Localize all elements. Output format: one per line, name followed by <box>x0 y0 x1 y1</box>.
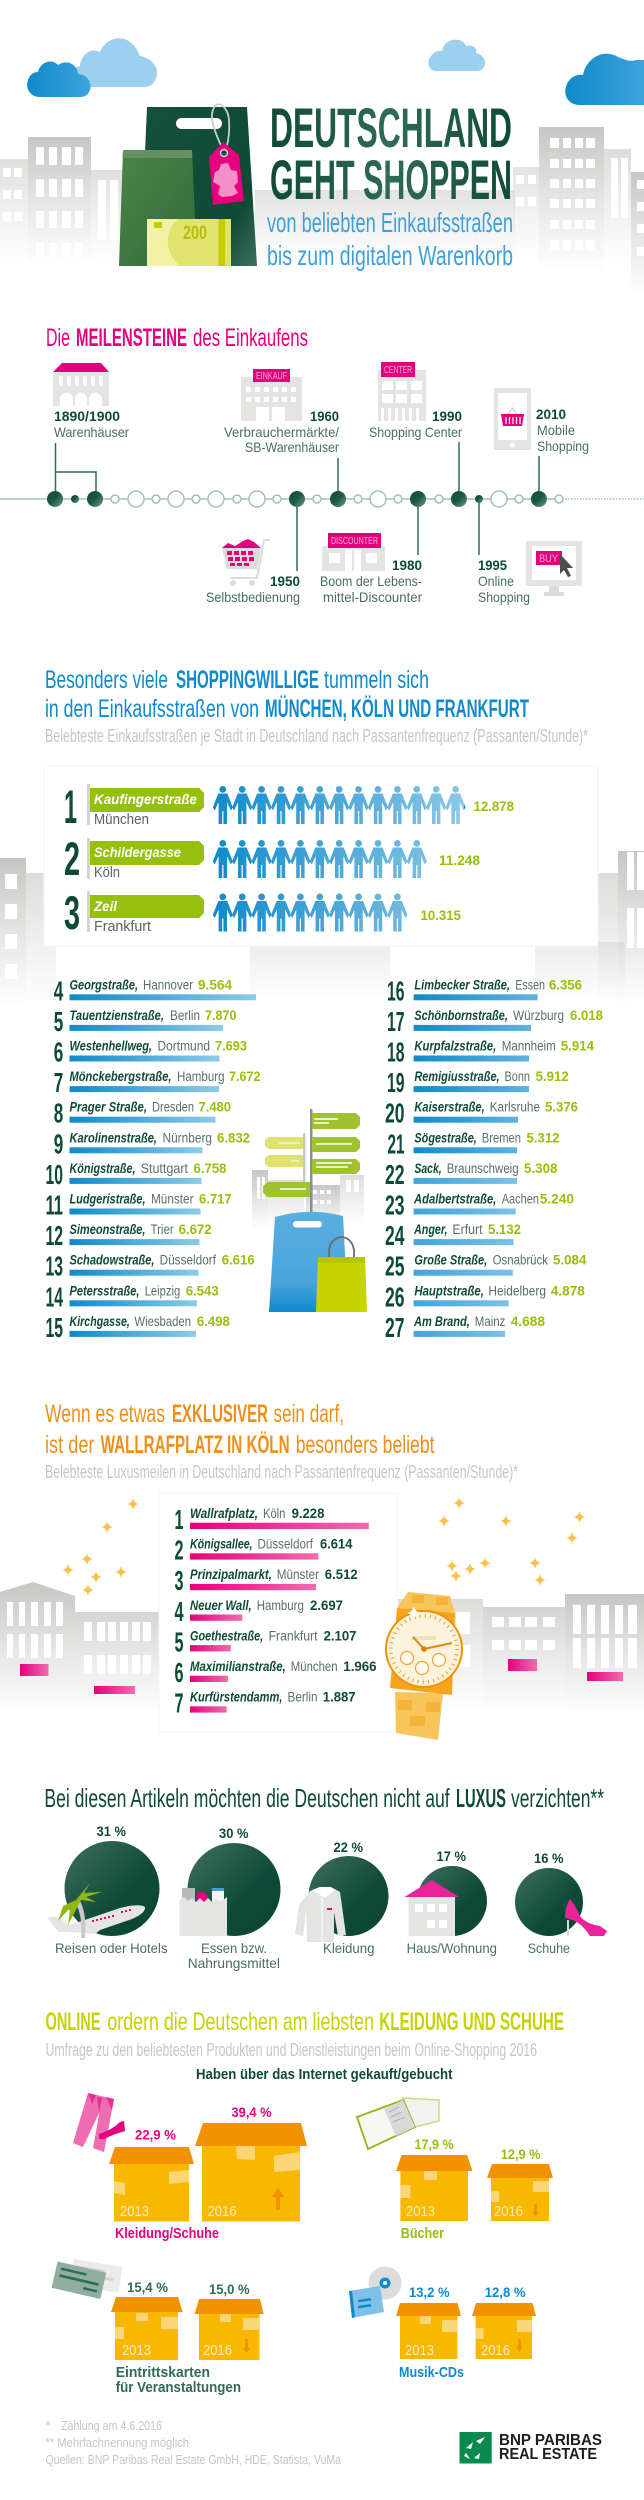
ranking list left column: ranks 4 to 15: 6.717 <box>199 1190 232 1206</box>
heading: top shopping streets: Besonders viele <box>45 666 168 694</box>
ranking list right column: ranks 16 to 27: 16 <box>387 975 404 1006</box>
icon: trousers and shoe <box>73 2093 125 2152</box>
chart: music CDs boxes: 2013 <box>405 2342 434 2359</box>
background buildings behind ranking <box>0 851 644 1008</box>
ranking list right column: ranks 16 to 27: 5.132 <box>488 1221 521 1237</box>
panel: top 3 shopping streets <box>44 766 598 946</box>
ranking list right column: ranks 16 to 27: Sögestraße, <box>414 1130 477 1145</box>
icon: monitor with buy button: BUY <box>539 553 559 565</box>
panel: luxury street ranking: Neuer Wall, <box>190 1598 252 1613</box>
ranking list left column: ranks 4 to 15: Königstraße, <box>70 1161 136 1176</box>
ranking list left column: ranks 4 to 15: 11 <box>46 1190 63 1220</box>
rank 3 Zeil: 3 <box>64 886 80 939</box>
hollow nodes <box>111 491 563 507</box>
footnotes and sources: Zählung am 4.6.2016 <box>61 2418 162 2433</box>
icon: consumer market: EINKAUF <box>256 371 287 382</box>
heading: top shopping streets: SHOPPINGWILLIGE <box>176 666 319 694</box>
ranking list right column: ranks 16 to 27: 25 <box>385 1251 404 1282</box>
timeline base line <box>0 498 558 500</box>
milestone 1995: Online <box>478 573 514 589</box>
ranking list left column: ranks 4 to 15: 7.672 <box>229 1068 261 1084</box>
ranking list right column: ranks 16 to 27: Sack, <box>414 1161 442 1176</box>
ranking list left column: ranks 4 to 15: Wiesbaden <box>134 1314 191 1329</box>
ranking list right column: ranks 16 to 27: Kaiserstraße, <box>414 1100 485 1115</box>
luxury street scene: buildings <box>0 1582 644 1715</box>
ranking list right column: ranks 16 to 27: Erfurt <box>452 1222 483 1237</box>
back bag <box>140 107 257 266</box>
ranking list left column: ranks 4 to 15: Berlin <box>170 1008 200 1023</box>
ranking list right column: ranks 16 to 27: 5.376 <box>545 1099 578 1115</box>
ranking list left column: ranks 4 to 15: 13 <box>46 1251 63 1282</box>
ranking list left column: ranks 4 to 15: 10 <box>46 1159 63 1190</box>
box 2013 <box>396 2303 461 2359</box>
ranking list left column: ranks 4 to 15: 5 <box>54 1006 63 1037</box>
milestone 2010: Shopping <box>537 438 589 454</box>
ranking list right column: ranks 16 to 27: Bremen <box>482 1130 521 1145</box>
ranking list right column: ranks 16 to 27: Anger, <box>413 1222 448 1237</box>
ranking list left column: ranks 4 to 15: 15 <box>46 1312 63 1343</box>
ranking list right column: ranks 16 to 27: Osnabrück <box>493 1253 548 1268</box>
ranking list right column: ranks 16 to 27: 23 <box>385 1190 404 1220</box>
heading: top shopping streets: in den Einkaufsstraßen von <box>45 695 259 723</box>
chart: event tickets boxes: Eintrittskarten <box>116 2365 210 2381</box>
chart: event tickets boxes: 15,0 % <box>209 2281 250 2297</box>
connector lines <box>56 442 539 571</box>
item: clothing 22 percent: Kleidung <box>323 1940 374 1956</box>
milestone 1950: Selbstbedienung <box>206 589 300 605</box>
ranking list left column: ranks 4 to 15: 4 <box>54 975 64 1006</box>
ranking list left column: ranks 4 to 15: Hamburg <box>177 1069 225 1084</box>
panel: luxury street ranking: 9.228 <box>292 1505 325 1521</box>
ranking list left column: ranks 4 to 15: 6.832 <box>217 1129 250 1145</box>
item: travel and hotels 31 percent: Reisen oder Hotels <box>55 1940 168 1956</box>
header: background city and clouds <box>0 38 644 297</box>
chart caption: Haben über das Internet gekauft/gebucht <box>196 2066 452 2083</box>
item: house 17 percent: Haus/Wohnung <box>407 1940 497 1956</box>
heading: top shopping streets <box>45 666 529 723</box>
panel: luxury street ranking: Maximilianstraße, <box>190 1659 286 1674</box>
heading: luxury streets: EXKLUSIVER <box>172 1400 268 1428</box>
cloud: dark left <box>27 61 90 97</box>
filled milestone nodes <box>47 491 547 507</box>
panel: luxury street ranking: 5 <box>174 1626 184 1657</box>
ranking list left column: ranks 4 to 15: Leipzig <box>145 1283 180 1298</box>
footnotes and sources: ** Mehrfachnennung möglich <box>46 2435 189 2450</box>
ranking list left column: ranks 4 to 15: Münster <box>151 1192 194 1206</box>
rank 3 Zeil: Zeil <box>93 898 118 914</box>
ranking list left column: ranks 4 to 15: 6 <box>54 1036 63 1068</box>
milestone 1960: SB-Warenhäuser <box>245 439 339 455</box>
panel: luxury street ranking: 1 <box>174 1504 184 1535</box>
panel: luxury street ranking: Hamburg <box>257 1598 304 1613</box>
ranking list right column: ranks 16 to 27: 4.878 <box>551 1282 585 1298</box>
milestone 2010: Mobile <box>537 422 575 438</box>
ranking list right column: ranks 16 to 27: Am Brand, <box>413 1314 470 1329</box>
ranking list left column: ranks 4 to 15: Schadowstraße, <box>70 1253 154 1268</box>
ranking list right column: ranks 16 to 27: 22 <box>385 1159 404 1190</box>
milestone 1995 <box>478 541 582 605</box>
value labels <box>420 798 514 923</box>
chart: clothing and shoes boxes <box>73 2093 307 2242</box>
ranking list left column: ranks 4 to 15: Dresden <box>152 1100 194 1115</box>
ranking list right column: ranks 16 to 27: Aachen <box>502 1192 539 1206</box>
heading: milestones: MEILENSTEINE <box>76 324 187 352</box>
icon: shopping center: CENTER <box>384 364 412 376</box>
ranking list left column: ranks 4 to 15: 12 <box>46 1220 63 1251</box>
ranking list right column: ranks 16 to 27: 20 <box>385 1098 404 1129</box>
icon: house <box>404 1880 459 1936</box>
rank 1 Kaufingerstraße: Kaufingerstraße <box>94 791 197 807</box>
ranking list right column: ranks 16 to 27: 27 <box>385 1312 404 1343</box>
ranking list left column: ranks 4 to 15: 6.758 <box>194 1160 227 1176</box>
ranking list left column: ranks 4 to 15: Simeonstraße, <box>70 1222 146 1237</box>
ranking list right column: ranks 16 to 27: Große Straße, <box>414 1253 487 1268</box>
ranking list left column: ranks 4 to 15: Mönckebergstraße, <box>70 1069 172 1084</box>
chart: books boxes: 2016 <box>494 2203 523 2220</box>
ranking list left column: ranks 4 to 15: 9 <box>54 1128 63 1159</box>
ranking list right column: ranks 16 to 27: 18 <box>387 1036 404 1068</box>
ranking list left column: ranks 4 to 15: Dortmund <box>158 1038 210 1054</box>
yellow bag <box>316 1237 367 1312</box>
main title: bis zum digitalen Warenkorb <box>267 240 513 271</box>
heading: top shopping streets: tummeln sich <box>324 666 429 694</box>
chart: clothing and shoes boxes: 2016 <box>208 2203 236 2220</box>
panel: luxury street ranking: Berlin <box>288 1690 318 1705</box>
bag handle hole <box>176 118 222 129</box>
value labels: 11.248 <box>439 852 480 868</box>
heading: online shopping: ONLINE <box>46 2008 100 2036</box>
ranking list left column: ranks 4 to 15: Georgstraße, <box>70 977 138 992</box>
milestone 1990 <box>369 362 462 440</box>
price tag with Germany map <box>209 104 244 205</box>
ranking list left column: ranks 4 to 15: Westenhellweg, <box>70 1038 152 1054</box>
ranking list right column: ranks 16 to 27: 26 <box>385 1281 404 1312</box>
item: food 30 percent: Essen bzw. <box>201 1940 267 1956</box>
rank 1 Kaufingerstraße: 1 <box>64 780 77 833</box>
ranking list left column: ranks 4 to 15: 7.870 <box>205 1007 237 1023</box>
value labels: 10.315 <box>420 907 461 923</box>
milestone 1980: Boom der Lebens- <box>320 573 422 589</box>
panel: luxury street ranking <box>159 1493 398 1732</box>
panel: luxury street ranking: 2 <box>174 1535 184 1566</box>
chart: event tickets boxes: 2016 <box>203 2342 232 2359</box>
item: shoes 16 percent <box>515 1850 607 1956</box>
banknote: 200 <box>183 223 207 244</box>
blue bag <box>269 1212 348 1312</box>
box 2013 <box>111 2297 183 2360</box>
ranking list left column: ranks 4 to 15: 7.480 <box>198 1099 231 1115</box>
chart: music CDs boxes <box>349 2266 536 2381</box>
ranking list right column: ranks 16 to 27: Hauptstraße, <box>414 1283 484 1298</box>
panel: luxury street ranking: Kurfürstendamm, <box>190 1690 282 1705</box>
icon: tickets <box>52 2259 123 2299</box>
panel: luxury street ranking: Prinzipalmarkt, <box>190 1567 272 1582</box>
ranking list right column: ranks 16 to 27: 17 <box>387 1006 404 1037</box>
item: house 17 percent <box>404 1848 497 1956</box>
heading: luxury streets: ist der <box>45 1431 94 1459</box>
ranking list right column: ranks 16 to 27: Schönbornstraße, <box>414 1008 508 1023</box>
ranking list left column: ranks 4 to 15: Karolinenstraße, <box>70 1130 157 1145</box>
box 2016 <box>487 2164 553 2221</box>
chart: books boxes: Bücher <box>401 2226 444 2242</box>
panel: luxury street ranking: Königsallee, <box>190 1537 253 1552</box>
milestone 2010 <box>494 388 589 454</box>
panel: luxury street ranking: Düsseldorf <box>258 1537 313 1552</box>
ranking list right column: ranks 16 to 27: 5.912 <box>536 1068 569 1084</box>
ranking list right column: ranks 16 to 27: Karlsruhe <box>490 1100 540 1115</box>
ranking list left column: ranks 4 to 15: Stuttgart <box>141 1161 188 1176</box>
milestone 1980 <box>320 533 422 605</box>
rank 3 Zeil <box>64 886 204 939</box>
ranking list left column: ranks 4 to 15: Hannover <box>143 977 193 992</box>
ranking list right column: ranks 16 to 27: 6.018 <box>570 1007 603 1023</box>
panel: luxury street ranking: Goethestraße, <box>190 1628 263 1643</box>
rank 1 Kaufingerstraße <box>64 780 204 833</box>
ranking list left column: ranks 4 to 15: Kirchgasse, <box>70 1314 130 1329</box>
icon: airplane and palm <box>47 1883 145 1938</box>
chart: music CDs boxes: 12,8 % <box>485 2284 526 2300</box>
item: food 30 percent: 30 % <box>219 1825 249 1841</box>
chart: books boxes: 17,9 % <box>414 2136 454 2152</box>
heading: luxury streets: besonders beliebt <box>296 1431 435 1459</box>
chart: event tickets boxes: 15,4 % <box>127 2279 169 2295</box>
ranking list left column: ranks 4 to 15: Ludgeristraße, <box>70 1192 146 1206</box>
milestone 1990: Shopping Center <box>369 424 462 440</box>
panel: luxury street ranking: 6.614 <box>320 1536 353 1552</box>
ranking list left column: ranks 4 to 15: 9.564 <box>198 976 232 992</box>
rank 2 Schildergasse: Köln <box>94 864 120 881</box>
chart: clothing and shoes boxes: 22,9 % <box>135 2126 177 2142</box>
panel: luxury street ranking: Frankfurt <box>269 1628 318 1643</box>
chart: music CDs boxes: Musik-CDs <box>399 2365 464 2381</box>
panel: luxury street ranking: 6.512 <box>325 1566 358 1582</box>
icon: CD and case <box>349 2266 402 2318</box>
icon: smartphone with basket <box>494 388 531 450</box>
icon: shopping cart <box>222 539 270 586</box>
banknote <box>147 219 231 266</box>
panel: luxury street ranking: 1.887 <box>323 1689 356 1705</box>
ranking list right column: ranks 16 to 27: Limbecker Straße, <box>414 977 510 992</box>
small buildings <box>252 1170 364 1230</box>
icon: high heel <box>565 1899 607 1936</box>
milestone 1950 <box>206 539 300 605</box>
title illustration: shopping bags with tag and banknote <box>119 104 257 266</box>
rank 3 Zeil: Frankfurt <box>94 918 152 935</box>
rank 2 Schildergasse: 2 <box>64 832 80 885</box>
main title <box>267 97 513 271</box>
ranking list right column: ranks 16 to 27 <box>385 975 603 1343</box>
main title: von beliebten Einkaufsstraßen <box>267 207 513 238</box>
box 2016 <box>472 2303 536 2359</box>
cloud: dark right <box>565 54 644 105</box>
ranking list right column: ranks 16 to 27: Heidelberg <box>488 1283 546 1298</box>
rank 1 Kaufingerstraße: München <box>94 811 149 828</box>
ranking list right column: ranks 16 to 27: Mannheim <box>502 1038 556 1054</box>
ranking list right column: ranks 16 to 27: 5.240 <box>540 1190 574 1206</box>
footnotes and sources <box>46 2418 342 2467</box>
heading: luxury streets <box>45 1400 435 1459</box>
ranking list right column: ranks 16 to 27: 5.308 <box>524 1160 558 1176</box>
ranking list right column: ranks 16 to 27: Adalbertstraße, <box>413 1192 496 1206</box>
icon: open book <box>357 2098 439 2149</box>
panel: luxury street ranking: Köln <box>263 1506 285 1521</box>
milestone 1960: Verbrauchermärkte/ <box>224 424 339 440</box>
icon: grocery bag <box>180 1888 227 1936</box>
ranking list left column: ranks 4 to 15: 7.693 <box>215 1038 247 1054</box>
item: clothing 22 percent <box>295 1839 388 1956</box>
item: house 17 percent: 17 % <box>436 1848 466 1864</box>
heading: luxury streets: sein darf, <box>274 1400 344 1428</box>
item: shoes 16 percent: 16 % <box>534 1850 564 1866</box>
logo: BNP Paribas Real Estate: REAL ESTATE <box>499 2446 597 2463</box>
ranking list right column: ranks 16 to 27: Würzburg <box>513 1008 564 1023</box>
ranking list left column: ranks 4 to 15: 14 <box>46 1281 63 1312</box>
ranking list right column: ranks 16 to 27: 19 <box>387 1067 404 1098</box>
panel: luxury street ranking: 7 <box>174 1688 184 1719</box>
icon: shirt <box>295 1887 346 1942</box>
milestone 1980: 1980 <box>392 558 422 573</box>
icon: discounter store: DISCOUNTER <box>331 535 378 547</box>
rank 2 Schildergasse <box>64 832 204 885</box>
ranking list left column: ranks 4 to 15: Tauentzienstraße, <box>70 1008 164 1023</box>
signpost <box>263 1109 360 1213</box>
ranking list left column: ranks 4 to 15: Prager Straße, <box>70 1100 147 1115</box>
heading: milestones: des Einkaufens <box>193 324 308 352</box>
front bag <box>119 150 197 266</box>
ranking list right column: ranks 16 to 27: 24 <box>385 1220 405 1251</box>
milestone 1990: 1990 <box>432 409 462 424</box>
ranking list right column: ranks 16 to 27: 5.084 <box>553 1252 587 1268</box>
rank 2 Schildergasse: Schildergasse <box>94 844 181 860</box>
panel: luxury street ranking: Wallrafplatz, <box>190 1506 258 1521</box>
item: travel and hotels 31 percent <box>47 1823 168 1956</box>
chart: event tickets boxes: für Veranstaltungen <box>116 2380 241 2396</box>
icon: department store <box>53 363 109 406</box>
box 2013 <box>109 2147 194 2222</box>
ranking list left column: ranks 4 to 15: Nürnberg <box>162 1130 212 1145</box>
chart: books boxes <box>357 2098 553 2242</box>
heading: luxury articles: Bei diesen Artikeln möchten die Deutschen nicht auf <box>44 1783 450 1813</box>
ranking list right column: ranks 16 to 27: Essen <box>515 977 545 992</box>
panel: luxury street ranking: 6 <box>174 1657 184 1688</box>
ranking list left column: ranks 4 to 15: 7 <box>54 1067 63 1098</box>
timeline <box>0 442 644 571</box>
chart: music CDs boxes: 13,2 % <box>409 2284 450 2300</box>
chart: clothing and shoes boxes: 39,4 % <box>232 2104 272 2120</box>
ranking list right column: ranks 16 to 27: Braunschweig <box>447 1161 519 1176</box>
heading: luxury articles: LUXUS <box>456 1783 506 1813</box>
milestone 1960: 1960 <box>310 409 339 424</box>
ranking list left column: ranks 4 to 15: Trier <box>150 1222 174 1237</box>
ranking list right column: ranks 16 to 27: 21 <box>388 1128 404 1159</box>
footnotes and sources: Quellen: BNP Paribas Real Estate GmbH, HDE, Statista, VuMa <box>46 2452 342 2467</box>
chart: clothing and shoes boxes: 2013 <box>120 2203 149 2220</box>
box 2013 <box>396 2155 472 2221</box>
panel: luxury street ranking: 2.697 <box>310 1597 343 1613</box>
panel: luxury street ranking: 4 <box>174 1596 184 1627</box>
ranking list right column: ranks 16 to 27: Bonn <box>504 1069 530 1084</box>
item: clothing 22 percent: 22 % <box>334 1839 363 1855</box>
ranking list left column: ranks 4 to 15: 8 <box>54 1098 63 1129</box>
logo: BNP Paribas Real Estate <box>460 2432 602 2464</box>
ranking list left column: ranks 4 to 15: 6.672 <box>179 1221 212 1237</box>
ranking list left column: ranks 4 to 15: 6.616 <box>222 1252 255 1268</box>
ranking list right column: ranks 16 to 27: 6.356 <box>549 976 582 992</box>
cloud: light middle <box>429 40 485 71</box>
logo: BNP Paribas Real Estate: BNP PARIBAS <box>499 2432 602 2449</box>
milestone 1995: Shopping <box>478 589 530 605</box>
chart: books boxes: 2013 <box>406 2203 435 2220</box>
panel: luxury street ranking: Münster <box>277 1567 319 1582</box>
chart: music CDs boxes: 2016 <box>481 2342 510 2359</box>
heading: online shopping: ordern die Deutschen am liebsten <box>107 2008 374 2036</box>
panel: luxury street ranking: 1.966 <box>343 1658 377 1674</box>
chart: clothing and shoes boxes: Kleidung/Schuhe <box>115 2226 219 2242</box>
heading: luxury streets: Wenn es etwas <box>45 1400 165 1428</box>
cloud: light left <box>71 38 157 87</box>
box 2016 <box>195 2299 264 2360</box>
panel: luxury street ranking: München <box>291 1659 338 1674</box>
ranking list right column: ranks 16 to 27: Mainz <box>475 1314 506 1329</box>
chart: books boxes: 12,9 % <box>501 2146 541 2162</box>
ranking list right column: ranks 16 to 27: Remigiusstraße, <box>414 1069 500 1084</box>
milestone 2010: 2010 <box>536 407 566 422</box>
ranking list left column: ranks 4 to 15: 6.543 <box>186 1282 219 1298</box>
background buildings <box>0 127 644 297</box>
box 2016 <box>195 2123 307 2222</box>
ranking list left column: ranks 4 to 15: Düsseldorf <box>160 1253 216 1268</box>
ranking list right column: ranks 16 to 27: Kurpfalzstraße, <box>414 1038 496 1054</box>
value labels: 12.878 <box>474 798 514 814</box>
ranking list right column: ranks 16 to 27: 4.688 <box>511 1313 545 1329</box>
item: food 30 percent <box>180 1825 280 1971</box>
item: travel and hotels 31 percent: 31 % <box>96 1823 126 1839</box>
panel: luxury street ranking: 2.107 <box>324 1627 357 1643</box>
milestone 1890/1900: 1890/1900 <box>54 409 120 424</box>
milestone 1950: 1950 <box>270 574 300 589</box>
chart: event tickets boxes <box>52 2259 264 2396</box>
heading: milestones: Die <box>46 324 70 352</box>
milestone 1995: 1995 <box>478 558 507 573</box>
heading: luxury streets: WALLRAFPLATZ IN KÖLN <box>101 1430 290 1459</box>
illustration: gold wristwatch <box>385 1592 463 1740</box>
milestone 1890/1900 <box>53 363 129 440</box>
milestone 1890/1900: Warenhäuser <box>54 424 129 440</box>
footnotes and sources: * <box>46 2418 51 2433</box>
decorative stars <box>62 1497 586 1596</box>
milestone 1960 <box>224 369 339 455</box>
ranking list left column: ranks 4 to 15: 6.498 <box>197 1313 230 1329</box>
ranking list right column: ranks 16 to 27: 5.312 <box>526 1129 560 1145</box>
illustration: signpost and shopping bags <box>252 1109 367 1312</box>
ranking list left column: ranks 4 to 15 <box>46 975 261 1343</box>
item: food 30 percent: Nahrungsmittel <box>188 1955 280 1971</box>
pictogram chart: people rows <box>212 784 466 934</box>
ranking list right column: ranks 16 to 27: 5.914 <box>561 1038 594 1054</box>
chart: event tickets boxes: 2013 <box>122 2342 151 2359</box>
milestone 1980: mittel-Discounter <box>323 589 422 605</box>
panel: luxury street ranking: 3 <box>174 1565 184 1596</box>
ranking list left column: ranks 4 to 15: Petersstraße, <box>70 1283 140 1298</box>
item: shoes 16 percent: Schuhe <box>528 1940 570 1956</box>
